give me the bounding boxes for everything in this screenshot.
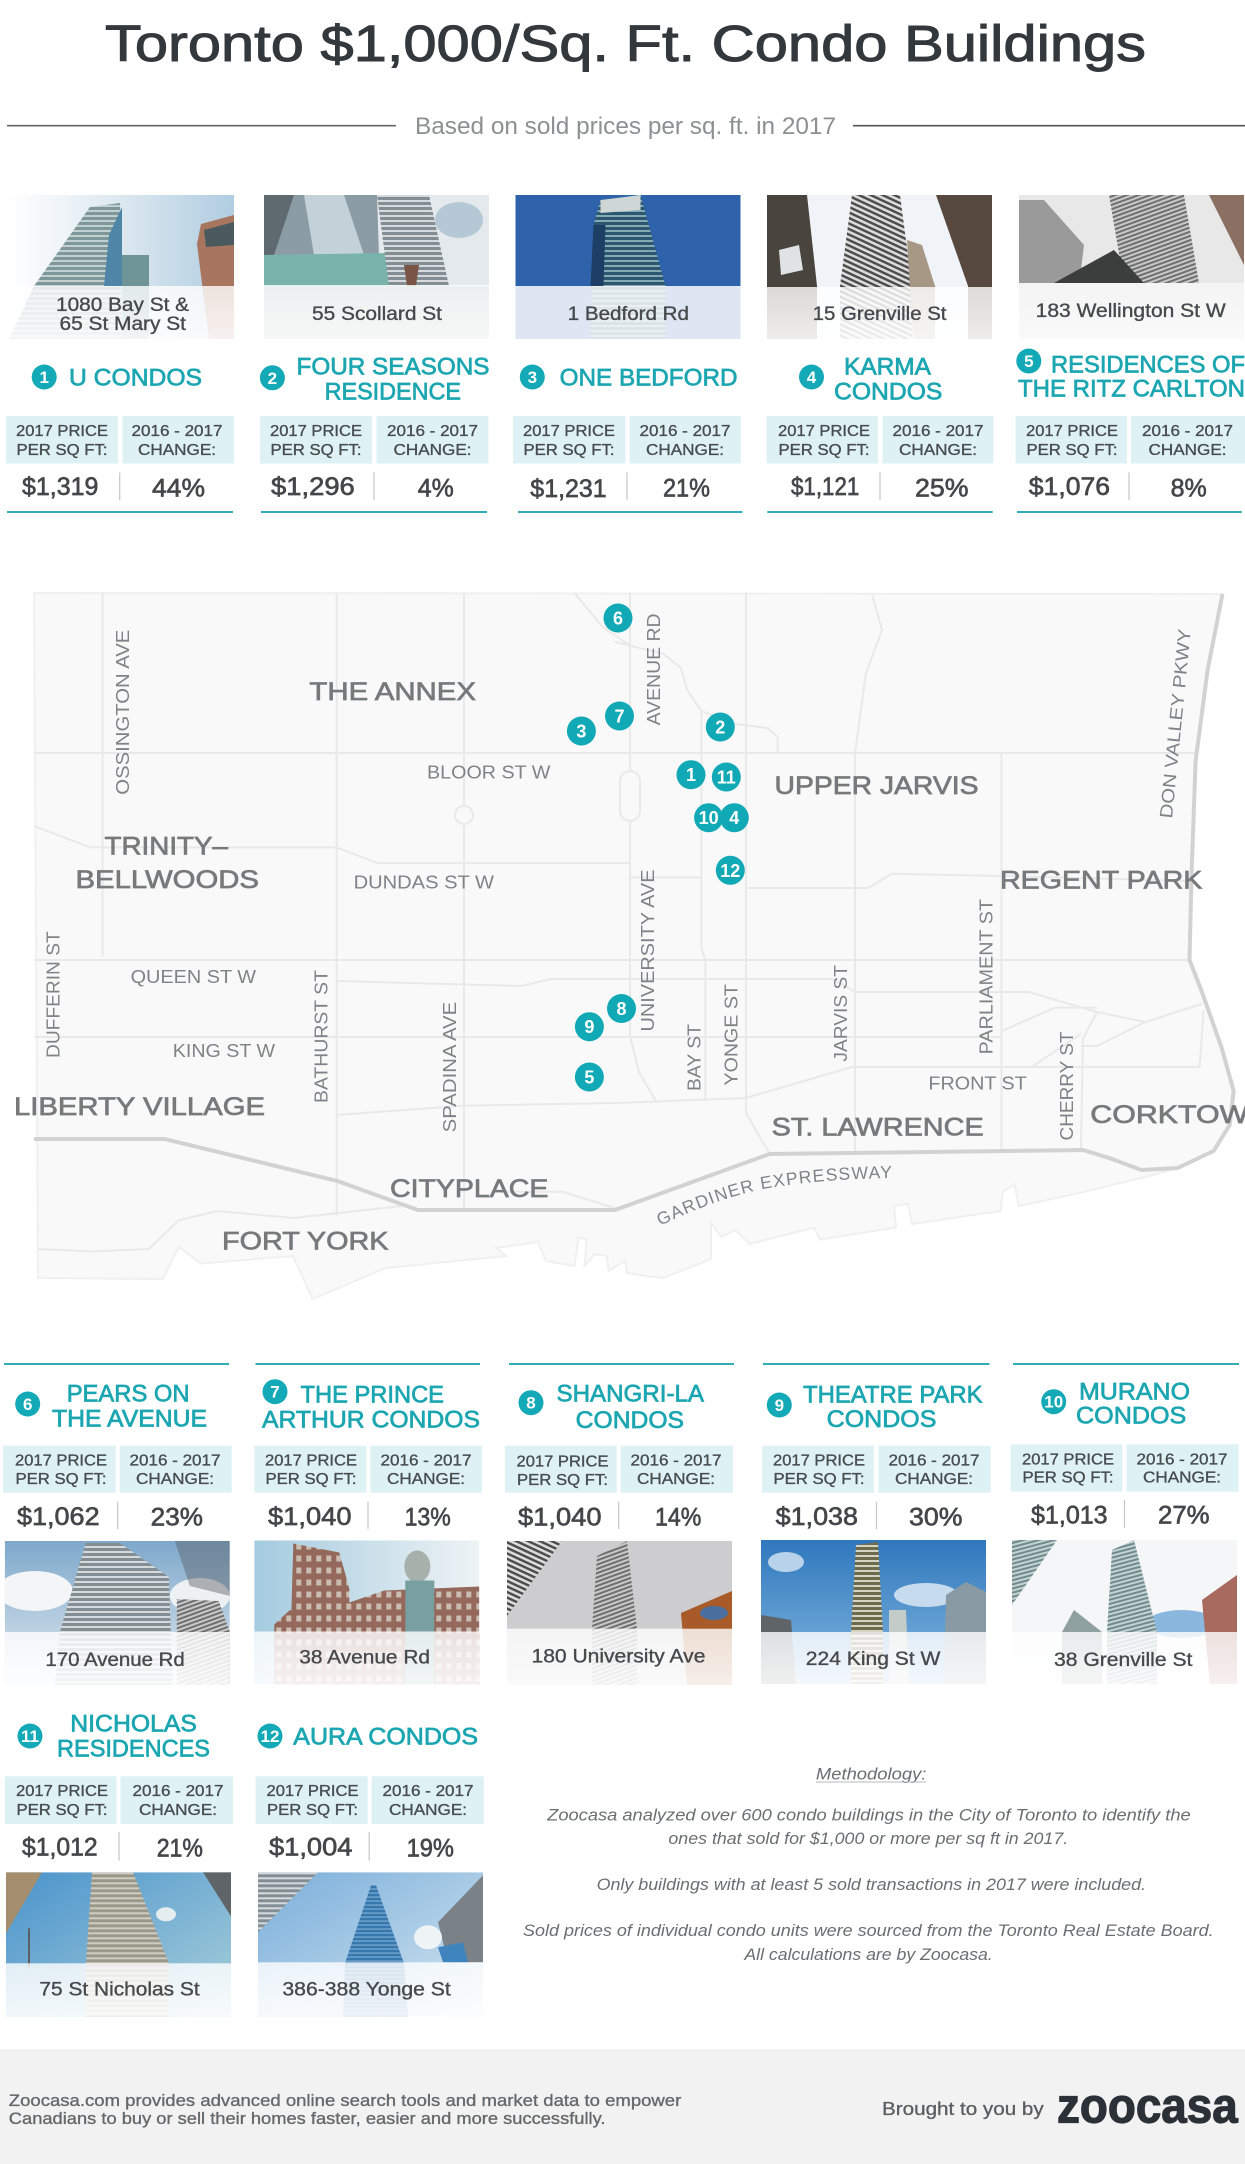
stats: 2016 - 2017 [640, 423, 731, 440]
street labels [43, 613, 1195, 1224]
stats: PER SQ FT: [517, 1472, 608, 1489]
heading: THE PRINCE [300, 1382, 444, 1409]
stats: 2017 PRICE [15, 1453, 107, 1470]
stats [762, 1446, 991, 1532]
neighbourhood labels: BELLWOODS [76, 866, 259, 894]
heading [1041, 1378, 1190, 1430]
stats: 2016 - 2017 [382, 1783, 474, 1800]
stats: CHANGE: [136, 1471, 214, 1488]
heading: 12 [261, 1727, 279, 1746]
address: 65 St Mary St [60, 314, 187, 335]
heading: ARTHUR CONDOS [262, 1407, 480, 1434]
stats: CHANGE: [1148, 442, 1226, 459]
address: 224 King St W [806, 1649, 940, 1670]
stats: PER SQ FT: [267, 1802, 358, 1819]
heading [18, 1711, 210, 1763]
stats [5, 1776, 233, 1862]
highways [34, 594, 1234, 1210]
stats: 19% [407, 1834, 454, 1862]
stats: PER SQ FT: [1026, 442, 1118, 459]
location pins: 1 [686, 765, 696, 785]
stats: 2017 PRICE [266, 1783, 358, 1800]
stats: PER SQ FT: [270, 442, 362, 459]
location pins: 4 [729, 808, 739, 828]
card 6: Pears on the Avenue [0, 1363, 232, 1685]
stats: $1,013 [1031, 1501, 1108, 1529]
stats: $1,319 [22, 473, 98, 501]
heading: PEARS ON [67, 1381, 190, 1408]
card 10: Murano Condos [1011, 1363, 1239, 1684]
stats [3, 1446, 232, 1532]
heading: AURA CONDOS [293, 1723, 478, 1750]
neighbourhood labels: CITYPLACE [390, 1175, 548, 1203]
street labels: DON VALLEY PKWY [1156, 628, 1195, 819]
card 2: Four Seasons Residence [260, 195, 490, 513]
neighbourhood labels: THE ANNEX [309, 678, 476, 706]
stats: 14% [655, 1504, 701, 1532]
neighbourhood labels: ST. LAWRENCE [772, 1114, 984, 1142]
street labels: BAY ST [684, 1024, 704, 1091]
street labels: KING ST W [173, 1041, 275, 1061]
stats: 2016 - 2017 [630, 1453, 722, 1470]
street labels: UNIVERSITY AVE [638, 869, 658, 1032]
address: 386-388 Yonge St [282, 1980, 452, 2001]
heading [15, 1381, 207, 1433]
land area [34, 593, 1234, 1299]
stats: $1,062 [17, 1503, 100, 1531]
photo: 180 University Ave [507, 1541, 732, 1685]
location pins [567, 604, 749, 1092]
location pins: 8 [616, 999, 627, 1019]
stats [254, 1446, 482, 1532]
location pins: 10 [699, 808, 719, 828]
stats: 2017 PRICE [523, 423, 615, 440]
footer text [9, 2091, 682, 2128]
street labels: BATHURST ST [311, 970, 331, 1103]
stats: PER SQ FT: [16, 1802, 107, 1819]
address: 15 Grenville St [813, 304, 947, 325]
stats [6, 416, 234, 513]
stats [256, 1776, 484, 1862]
neighbourhood labels [14, 678, 1245, 1256]
neighbourhood labels: FORT YORK [222, 1228, 389, 1256]
stats: PER SQ FT: [524, 442, 614, 459]
stats: 2016 - 2017 [888, 1453, 980, 1470]
stats: PER SQ FT: [774, 1471, 864, 1488]
stats: CHANGE: [387, 1471, 465, 1488]
stats: CHANGE: [637, 1471, 715, 1488]
address: 1 Bedford Rd [568, 304, 689, 325]
heading: 6 [23, 1395, 32, 1414]
heading [799, 354, 942, 405]
methodology: Sold prices of individual condo units were sourced from the Toronto Real Estate Board. [523, 1921, 1214, 1940]
photo: 183 Wellington St W [1019, 195, 1244, 312]
heading [767, 1382, 983, 1433]
footer text: Zoocasa.com provides advanced online search tools and market data to empower [9, 2091, 682, 2110]
stats: CHANGE: [895, 1471, 973, 1488]
street labels: PARLIAMENT ST [976, 899, 996, 1054]
location pins: 11 [717, 768, 736, 788]
stats: $1,231 [530, 475, 607, 503]
stats: 4% [418, 474, 454, 502]
stats: CHANGE: [139, 1802, 217, 1819]
heading: ONE BEDFORD [560, 365, 738, 392]
photo: 38 Avenue Rd [254, 1540, 479, 1684]
photo: 1080 Bay St [9, 195, 234, 339]
location pins: 6 [613, 608, 623, 628]
photo: 75 St Nicholas St [6, 1872, 231, 2016]
heading: FOUR SEASONS [296, 354, 490, 381]
photo: 1 Bedford Rd [516, 195, 740, 339]
stats: 25% [915, 474, 969, 502]
street labels: CHERRY ST [1057, 1031, 1077, 1140]
stats: 8% [1171, 474, 1207, 502]
location pins: 5 [584, 1068, 594, 1088]
subtitle with rules: Based on sold prices per sq. ft. in 2017 [415, 113, 836, 140]
map [14, 592, 1245, 1300]
stats: 2017 PRICE [270, 423, 362, 440]
stats: CHANGE: [138, 442, 216, 459]
brought to you by: Brought to you by [882, 2098, 1045, 2119]
stats: $1,038 [776, 1503, 858, 1531]
neighbourhood labels: CORKTOWN [1090, 1101, 1245, 1129]
stats: CHANGE: [389, 1802, 467, 1819]
address: 170 Avenue Rd [45, 1650, 185, 1671]
address: 38 Avenue Rd [299, 1647, 430, 1668]
location pins: 3 [576, 722, 586, 742]
stats: 13% [405, 1504, 451, 1532]
heading: 7 [270, 1383, 280, 1402]
heading: THE AVENUE [52, 1406, 207, 1433]
heading [518, 1381, 704, 1434]
address: 38 Grenville St [1054, 1650, 1193, 1671]
neighbourhood labels: TRINITY– [104, 832, 228, 860]
stats: $1,040 [518, 1504, 602, 1532]
street labels: DUFFERIN ST [43, 931, 63, 1058]
logo: zoocasa: zoocasa [1057, 2080, 1238, 2134]
heading: 10 [1044, 1393, 1063, 1412]
stats: $1,076 [1029, 473, 1110, 501]
stats: 2016 - 2017 [892, 423, 984, 440]
location pins: 2 [715, 718, 725, 738]
heading: 11 [21, 1727, 39, 1746]
methodology [523, 1764, 1214, 1964]
footer text: Canadians to buy or sell their homes faster, easier and more successfully. [9, 2109, 606, 2128]
street labels: SPADINA AVE [440, 1002, 460, 1132]
photo: 38 Grenville St [1012, 1540, 1237, 1684]
stats: $1,121 [791, 473, 859, 501]
neighbourhood labels: REGENT PARK [1000, 866, 1203, 894]
heading: 2 [268, 369, 277, 388]
stats: 2017 PRICE [773, 1453, 865, 1470]
heading: KARMA [844, 354, 931, 381]
stats: 2017 PRICE [16, 1783, 108, 1800]
stats: 21% [663, 474, 710, 502]
stats: 2016 - 2017 [387, 423, 478, 440]
address: 55 Scollard St [312, 304, 443, 325]
card 7: The Prince Arthur Condos [254, 1363, 482, 1684]
footer [0, 2049, 1245, 2164]
stats [766, 416, 994, 513]
stats [513, 416, 742, 513]
heading: THEATRE PARK [803, 1382, 983, 1409]
address: 75 St Nicholas St [39, 1980, 200, 2001]
stats: PER SQ FT: [16, 442, 107, 459]
stats: PER SQ FT: [778, 442, 870, 459]
heading: CONDOS [827, 1406, 936, 1433]
card 9: Theatre Park Condos [761, 1363, 991, 1684]
heading [1016, 348, 1245, 403]
heading: 5 [1024, 352, 1034, 371]
stats [1016, 416, 1245, 513]
stats: 21% [157, 1834, 203, 1862]
card 3: One Bedford [513, 195, 742, 513]
heading: 4 [807, 368, 817, 387]
street labels: YONGE ST [721, 984, 741, 1086]
stats: $1,296 [271, 473, 355, 501]
stats: 23% [151, 1504, 203, 1532]
heading [260, 354, 490, 405]
heading: THE RITZ CARLTON [1018, 376, 1245, 403]
stats [1011, 1444, 1238, 1530]
stats [260, 416, 488, 513]
stats: 2017 PRICE [778, 423, 870, 440]
card 8: Shangri-La Condos [505, 1363, 734, 1685]
location pins: 9 [584, 1017, 594, 1037]
neighbourhood labels: UPPER JARVIS [774, 772, 978, 800]
stats: 2017 PRICE [16, 423, 108, 440]
heading [262, 1379, 480, 1434]
card 5: Residences of the Ritz Carlton [1016, 195, 1245, 513]
methodology: Only buildings with at least 5 sold transactions in 2017 were included. [597, 1875, 1146, 1894]
stats [505, 1446, 733, 1532]
heading: CONDOS [576, 1407, 684, 1434]
street labels: AVENUE RD [644, 613, 664, 725]
location pins: 12 [720, 861, 740, 881]
address: 1080 Bay St & [56, 295, 189, 316]
stats: 2017 PRICE [265, 1453, 357, 1470]
heading: CONDOS [1076, 1403, 1186, 1430]
methodology: All calculations are by Zoocasa. [743, 1945, 993, 1964]
heading: 9 [775, 1396, 784, 1415]
photo: 170 Avenue Rd [0, 1541, 230, 1685]
stats: PER SQ FT: [266, 1471, 356, 1488]
methodology: ones that sold for $1,000 or more per sq ft in 2017. [668, 1829, 1068, 1848]
card 4: Karma Condos [766, 195, 994, 513]
neighbourhood labels: LIBERTY VILLAGE [14, 1093, 265, 1121]
stats: $1,012 [22, 1834, 98, 1862]
photo: 55 Scollard St [264, 195, 489, 339]
stats: $1,004 [269, 1834, 353, 1862]
heading: 3 [528, 368, 537, 387]
stats: 2016 - 2017 [132, 423, 223, 440]
stats: 30% [909, 1504, 962, 1532]
heading: 8 [526, 1394, 536, 1413]
street grid [34, 593, 1204, 1252]
stats: 2017 PRICE [1022, 1451, 1114, 1468]
stats: PER SQ FT: [1022, 1470, 1114, 1487]
address: 180 University Ave [532, 1647, 705, 1668]
stats: CHANGE: [394, 442, 472, 459]
street labels: BLOOR ST W [427, 762, 550, 782]
methodology: Zoocasa analyzed over 600 condo buildings in the City of Toronto to identify the [546, 1806, 1191, 1825]
stats: 2017 PRICE [516, 1454, 608, 1471]
card 12: Aura Condos [256, 1723, 484, 2016]
heading: SHANGRI-LA [556, 1381, 704, 1408]
stats: CHANGE: [1143, 1470, 1221, 1487]
heading: 1 [39, 368, 49, 387]
photo: 386-388 Yonge St [258, 1872, 483, 2016]
address [56, 295, 189, 335]
stats: 2016 - 2017 [1136, 1451, 1228, 1468]
heading: U CONDOS [69, 365, 202, 392]
stats: CHANGE: [899, 442, 977, 459]
heading: RESIDENCE [325, 378, 461, 405]
stats: PER SQ FT: [16, 1471, 106, 1488]
stats: 44% [152, 474, 205, 502]
photo: 224 King St W [761, 1540, 986, 1684]
street labels: GARDINER EXPRESSWAY [658, 1166, 892, 1224]
stats: $1,040 [268, 1503, 352, 1531]
photo: 15 Grenville St [767, 195, 992, 339]
heading: NICHOLAS [70, 1711, 197, 1738]
location pins: 7 [614, 706, 625, 726]
street labels: JARVIS ST [831, 965, 851, 1062]
stats: CHANGE: [646, 442, 724, 459]
stats: 2016 - 2017 [380, 1453, 472, 1470]
stats: 2016 - 2017 [130, 1453, 221, 1470]
heading: RESIDENCES [57, 1736, 210, 1763]
card 11: Nicholas Residences [5, 1711, 233, 2016]
heading: MURANO [1079, 1378, 1190, 1405]
heading: RESIDENCES OF [1051, 352, 1245, 379]
street labels: OSSINGTON AVE [113, 630, 133, 795]
stats: 2016 - 2017 [132, 1783, 224, 1800]
title: Toronto $1,000/Sq. Ft. Condo Buildings [105, 15, 1146, 72]
stats: 2016 - 2017 [1142, 423, 1233, 440]
card 1: U Condos [6, 195, 234, 513]
methodology: Methodology: [816, 1764, 927, 1783]
street labels: FRONT ST [928, 1073, 1027, 1093]
street labels: DUNDAS ST W [354, 872, 494, 892]
heading: CONDOS [834, 378, 942, 405]
address: 183 Wellington St W [1036, 301, 1226, 322]
street labels: QUEEN ST W [131, 967, 256, 987]
stats: 27% [1158, 1502, 1210, 1530]
stats: 2017 PRICE [1026, 423, 1118, 440]
